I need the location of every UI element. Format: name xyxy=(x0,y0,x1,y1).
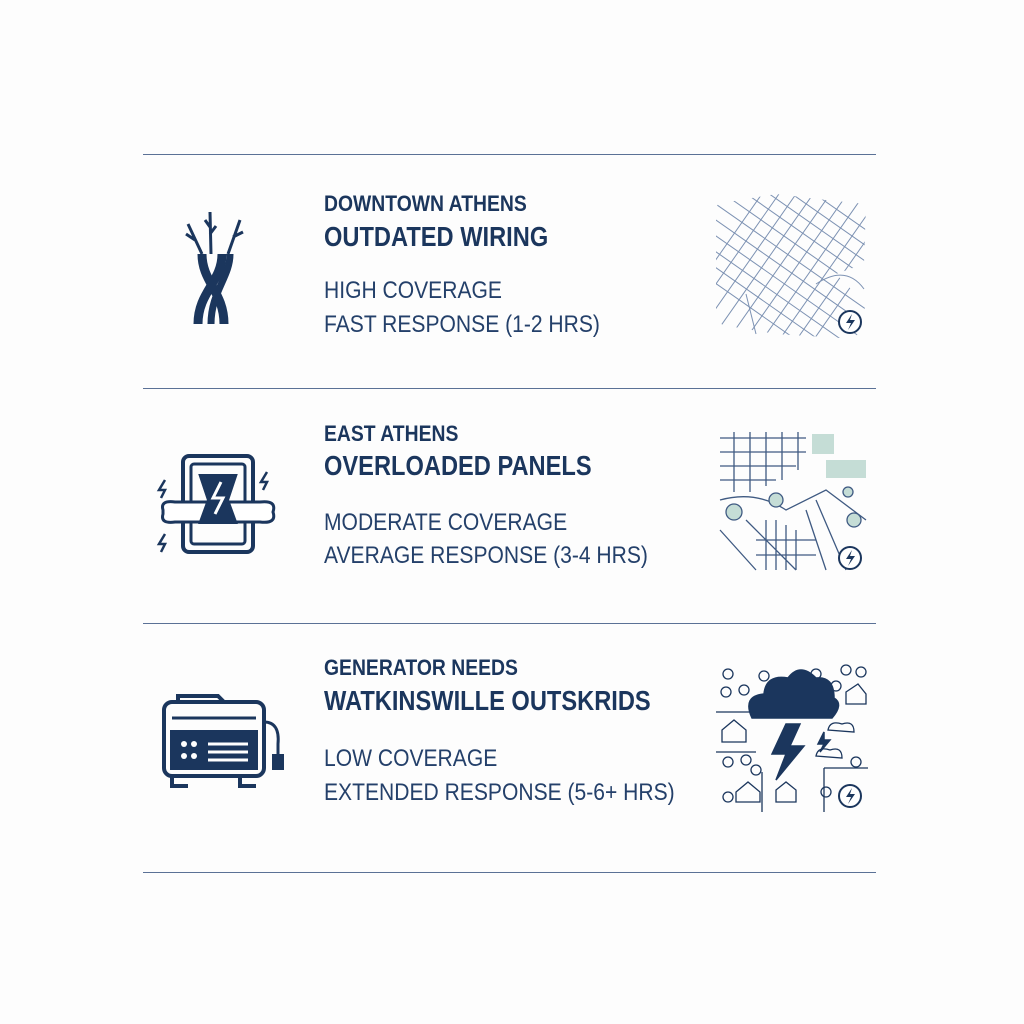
icon: twisted wires xyxy=(185,212,244,324)
text: MODERATE COVERAGE xyxy=(324,509,567,536)
text: row 1 xyxy=(324,191,600,338)
text: OVERLOADED PANELS xyxy=(324,450,592,481)
text: HIGH COVERAGE xyxy=(324,277,502,304)
text: OUTDATED WIRING xyxy=(324,221,548,252)
text: row 3 xyxy=(324,655,675,806)
text: GENERATOR NEEDS xyxy=(324,655,518,680)
text: WATKINSWILLE OUTSKRIDS xyxy=(324,685,651,716)
text: EXTENDED RESPONSE (5-6+ HRS) xyxy=(324,779,675,806)
text: EAST ATHENS xyxy=(324,421,458,446)
icon: overloaded panel xyxy=(156,454,276,554)
icon: generator xyxy=(162,694,284,788)
text: LOW COVERAGE xyxy=(324,745,497,772)
map: east athens xyxy=(720,432,866,570)
map: downtown grid xyxy=(716,194,866,338)
text: row 2 xyxy=(324,421,648,569)
text: FAST RESPONSE (1-2 HRS) xyxy=(324,311,600,338)
text: AVERAGE RESPONSE (3-4 HRS) xyxy=(324,542,648,569)
map: storm outskirts xyxy=(716,664,868,812)
text: DOWNTOWN ATHENS xyxy=(324,191,527,216)
